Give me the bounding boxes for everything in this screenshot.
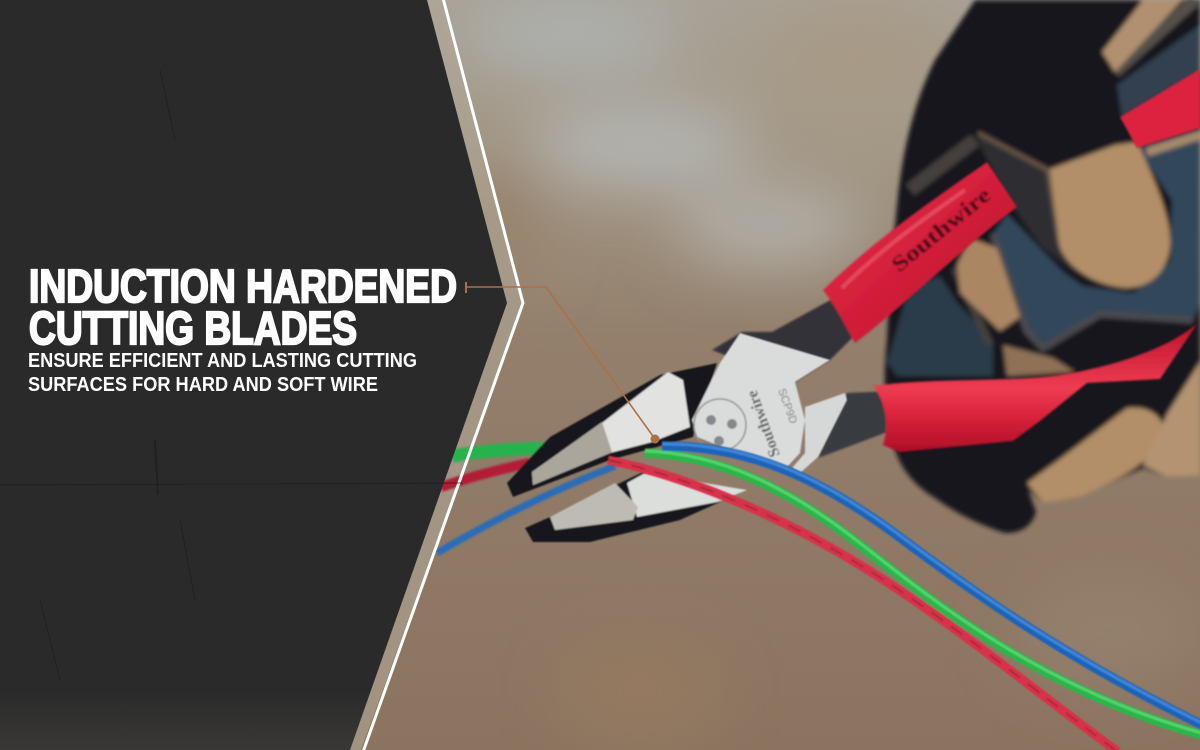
heading	[29, 260, 457, 354]
upper red grip: Southwire	[886, 182, 996, 277]
middle navy fabric	[993, 130, 1200, 348]
upper red grip	[823, 162, 1017, 343]
wires behind the pliers	[437, 448, 615, 553]
stitched seams	[993, 234, 1193, 348]
tan lower finger	[1027, 408, 1163, 503]
pliers head	[507, 333, 847, 542]
top-right navy fabric	[1117, 25, 1200, 118]
green wire	[645, 451, 1200, 735]
translucent chevron band	[350, 0, 523, 750]
tan top patch	[1102, 0, 1182, 72]
lower red grip	[873, 324, 1197, 452]
thumb seam band	[975, 135, 1080, 276]
main plate: SCP9D	[775, 387, 799, 426]
lower jaw	[525, 472, 747, 542]
wires in front of the pliers	[608, 444, 1200, 750]
callout leader line	[466, 282, 660, 444]
upper jaw	[507, 363, 717, 497]
heading: CUTTING BLADES	[29, 302, 357, 354]
glove and hand	[885, 0, 1200, 533]
heading: INDUCTION HARDENED	[29, 260, 457, 312]
white chevron line	[363, 0, 523, 750]
panel texture	[0, 70, 463, 680]
handles	[712, 69, 1200, 458]
tan lower palm	[1003, 345, 1075, 376]
main plate	[692, 333, 830, 467]
left palm navy	[887, 276, 993, 376]
subheading: SURFACES FOR HARD AND SOFT WIRE	[28, 373, 378, 396]
grip end, top right	[1120, 69, 1200, 148]
red wire	[608, 460, 1118, 750]
tan fingertip	[1050, 142, 1170, 288]
tan palm patch	[957, 238, 1020, 331]
dark lower handle	[818, 391, 906, 458]
subheading: ENSURE EFFICIENT AND LASTING CUTTING	[28, 349, 417, 372]
dark upper handle	[712, 292, 868, 382]
left dark panel	[0, 0, 523, 750]
blue wire	[662, 444, 1200, 725]
main plate: Southwire	[744, 388, 784, 459]
subheading	[28, 349, 417, 396]
tan right finger	[1143, 362, 1200, 477]
black glove silhouette	[885, 0, 1200, 533]
rear plate	[792, 393, 847, 473]
